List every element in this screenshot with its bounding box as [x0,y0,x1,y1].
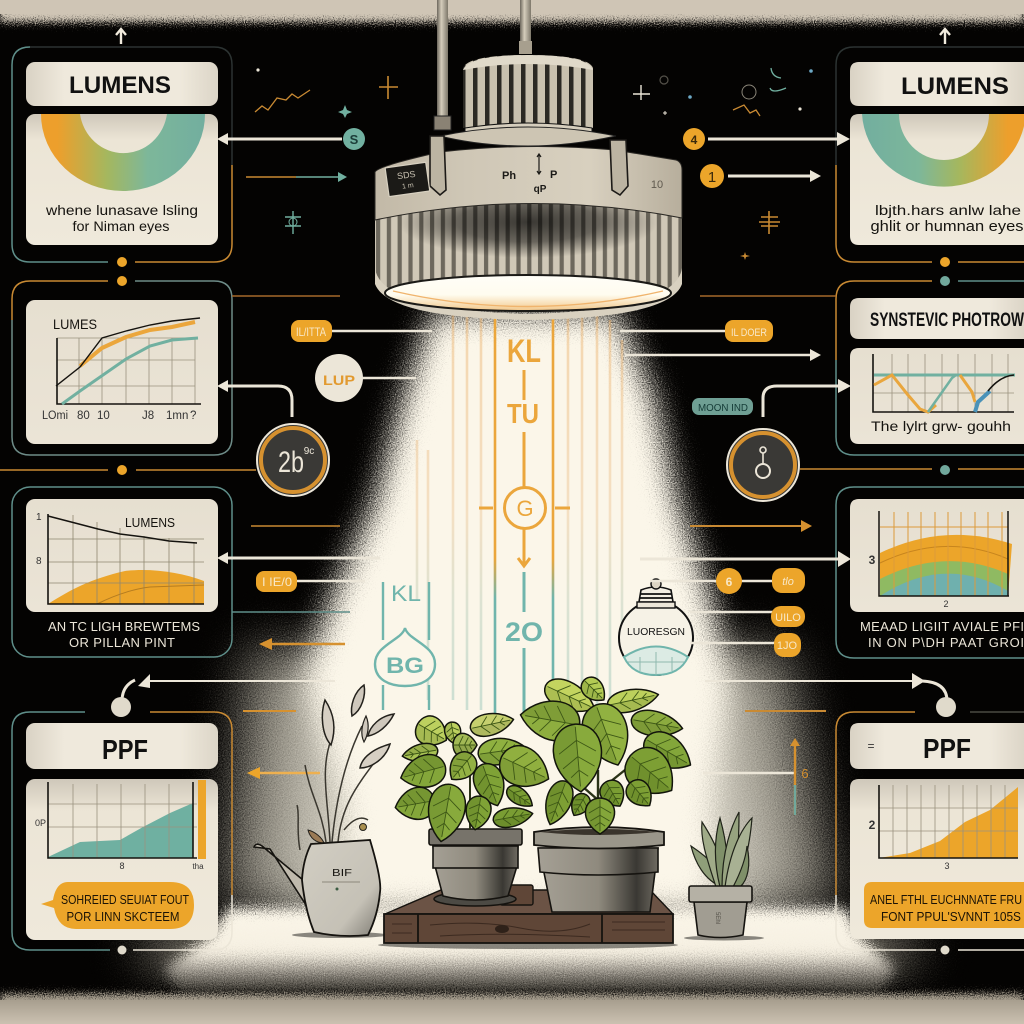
caption: OR PILLAN PINT [69,635,175,650]
area chart: 8 [36,556,42,567]
panel: bottom-left PPF [12,712,232,950]
card: ring gauge and caption: lbjth.hars anlw lahe [875,203,1021,218]
line chart: 1mn [166,410,188,422]
area chart [869,785,1018,871]
area chart: 0P [35,818,46,828]
plant: right pot [517,673,699,912]
line chart [871,354,1015,434]
line chart: LOmi [42,410,68,422]
heading: synthetic photon [850,298,1024,339]
bands chart: 3 [869,553,876,567]
arrow: to PPF node [111,674,335,717]
connector nodes [0,257,1024,954]
arrow: number one [700,164,821,188]
arrow: teal line [246,172,347,182]
pills: orange group [650,568,805,657]
background: lower mid-grey glow [285,670,775,907]
pills: orange group: UILO [775,612,801,624]
pills: orange group: 1JO [777,640,798,652]
arrow: to PPF node [705,673,956,717]
orange line [251,525,340,527]
heading: lumens [850,62,1024,106]
center diagram: KL TU circle arrow: TU [507,398,539,429]
line chart: ? [190,410,196,422]
panel: second-left lumens line chart [12,281,340,455]
line chart: 80 [77,410,90,422]
lamp lower heat sink [375,186,682,320]
center diagram: 20 teal: 2O [505,617,543,647]
pot [534,827,664,912]
area chart: 8 [119,861,125,871]
arrow: long cream [625,349,821,361]
lamp: hanging fixture [375,0,682,320]
area chart: 1 [36,512,42,523]
glass bulb: LUORESGN: LUORESGN [627,627,685,638]
center diagram: KL TU circle arrow: KL [507,333,541,369]
small pot: 5Ehl [714,912,720,924]
arrow: orange lower [247,767,320,779]
lamp body band: qP [534,184,547,195]
speech bubble [41,882,194,929]
teal bulb diagram: KL BG [375,581,435,710]
line chart: 10 [97,410,110,422]
pill: IL/ITTA: IL/ITTA [296,325,326,339]
line chart: LUMES [53,316,97,332]
arrow: to top-right card: 4 [691,133,698,147]
arrow: orange [259,638,345,650]
caption: MEAAD LIGIIT AVIALE PFI [860,619,1024,634]
lamp body band [375,127,682,220]
wooden platform [384,885,673,943]
lamp body band: P [550,169,557,181]
card: ring gauge and caption: ghlit or humnan eyes [870,219,1024,235]
panel: top-left lumens [12,47,232,262]
area chart: LUMENS [125,515,175,530]
area chart: 2 [869,818,876,832]
gauge: key icon [727,379,851,501]
heading: lumens [26,62,218,106]
circle: LUP: LUP [323,372,355,388]
lamp body band: SDS [396,169,416,181]
floor shadows [292,932,764,949]
heading: lumens: LUMENS [69,72,171,99]
background: top beige band [0,0,1024,14]
lamp body band: Ph [502,170,516,182]
left connectors and arrows [111,128,432,779]
arrow: to third-left card [217,552,380,564]
gauge: 2b: 9c [304,446,314,457]
card: ring gauge and caption: for Niman eyes [72,219,170,234]
heading: PPF: = [867,739,875,753]
line chart: The lylrt grw- gouhh [871,418,1011,434]
line chart: J8 [142,410,154,422]
heading: PPF: PPF [102,734,148,765]
background: light beam [305,312,728,907]
arrow: orange right [690,520,812,532]
background: lower dark-grey glow [225,650,835,907]
background: top beige band noisy edge [0,0,1024,22]
watering can with dry sprig [254,685,394,936]
pill: IL DOER: IL DOER [731,327,767,339]
heading: lumens: LUMENS [901,73,1009,100]
background: bottom beige band [0,1000,1024,1024]
pill: IL DOER [620,320,773,342]
can body and spout [254,840,380,936]
bands chart [869,511,1012,609]
speech bubble: POR LINN SKCTEEM [66,910,180,924]
heading: PPF [850,723,1024,769]
panel: third-right bands chart [836,487,1024,658]
caption [860,619,1024,650]
lamp top heat sink [463,55,593,132]
background: bottom beige band noisy edge [0,994,1024,1024]
leaves [393,709,557,845]
orange callout: FONT PPUL'SVNNT 105S [881,910,1021,924]
area chart [36,512,204,604]
orange line [243,710,296,712]
light beam rays [417,313,622,720]
pill: IIE/0: I IE/0 [262,575,292,589]
leaves [517,673,699,834]
arrow: to top-left card [217,128,365,150]
pill: MOON IND [692,398,753,415]
plant: left pot [393,709,557,906]
caption [48,619,200,650]
card: ring gauge and caption [850,114,1024,245]
gauge: 2b: 2b [278,446,304,479]
area chart: tha [192,862,204,871]
dry sprig [297,685,394,850]
speech bubble: SOHREIED SEUIAT FOUT [61,893,189,907]
arrow: to top-left card: S [350,132,359,147]
orange callout [864,882,1024,928]
arrow: to top-right card [683,128,850,150]
background: low floor glow [130,930,925,975]
lamp body band: 1 m [402,182,414,191]
spiky leaves [691,812,752,887]
glass bulb: LUORESGN [619,579,693,675]
can body and spout: BIF [332,867,352,879]
lamp glowing lens [385,275,671,311]
pill: IIE/0 [256,571,365,592]
pills: orange group: 6 [726,575,733,589]
panel: third-left lumens area chart [12,487,350,657]
teal bulb diagram: KL BG: KL [391,581,421,606]
line chart [42,316,201,422]
orange line [745,710,826,712]
circle: LUP [315,354,416,402]
heading: PPF: PPF [923,733,971,764]
arrow: up with label [703,738,809,815]
decorative sparkles: right [633,68,813,260]
card: ring gauge and caption: whene lunasave lsling [45,203,198,218]
arrows: top up arrows [116,29,950,44]
pill: IL/ITTA [291,320,432,342]
pot [429,829,522,906]
arrow: to third-right card [640,551,851,567]
caption: AN TC LIGH BREWTEMS [48,619,200,634]
teal bulb diagram: KL BG: BG [386,653,424,678]
background: lit floor [165,908,895,990]
pill: MOON IND: MOON IND [698,403,748,414]
center diagram: KL TU circle arrow: G [516,496,534,521]
plant: small succulent right [689,812,752,938]
caption: IN ON P\DH PAAT GROI [868,635,1024,650]
center diagram: KL TU circle arrow [479,333,570,566]
lamp body band: 10 [651,179,663,191]
gauge: 2b [217,380,329,496]
area chart [35,780,206,871]
decorative sparkles: left [255,68,398,234]
area chart: 3 [944,861,950,871]
heading: PPF [26,723,218,769]
right connectors and arrows [620,128,956,815]
card: ring gauge and caption [26,114,218,245]
panel: top-right lumens [836,47,1024,262]
panel: second-right synthetic photon [700,281,1024,455]
arrow: up with label: 6 [801,766,809,781]
panel: bottom-right PPF [836,712,1024,950]
bands chart: 2 [943,599,949,609]
arrow: number one: 1 [708,169,716,186]
lamp rods [434,0,532,130]
pills: orange group: tlo [782,576,794,588]
